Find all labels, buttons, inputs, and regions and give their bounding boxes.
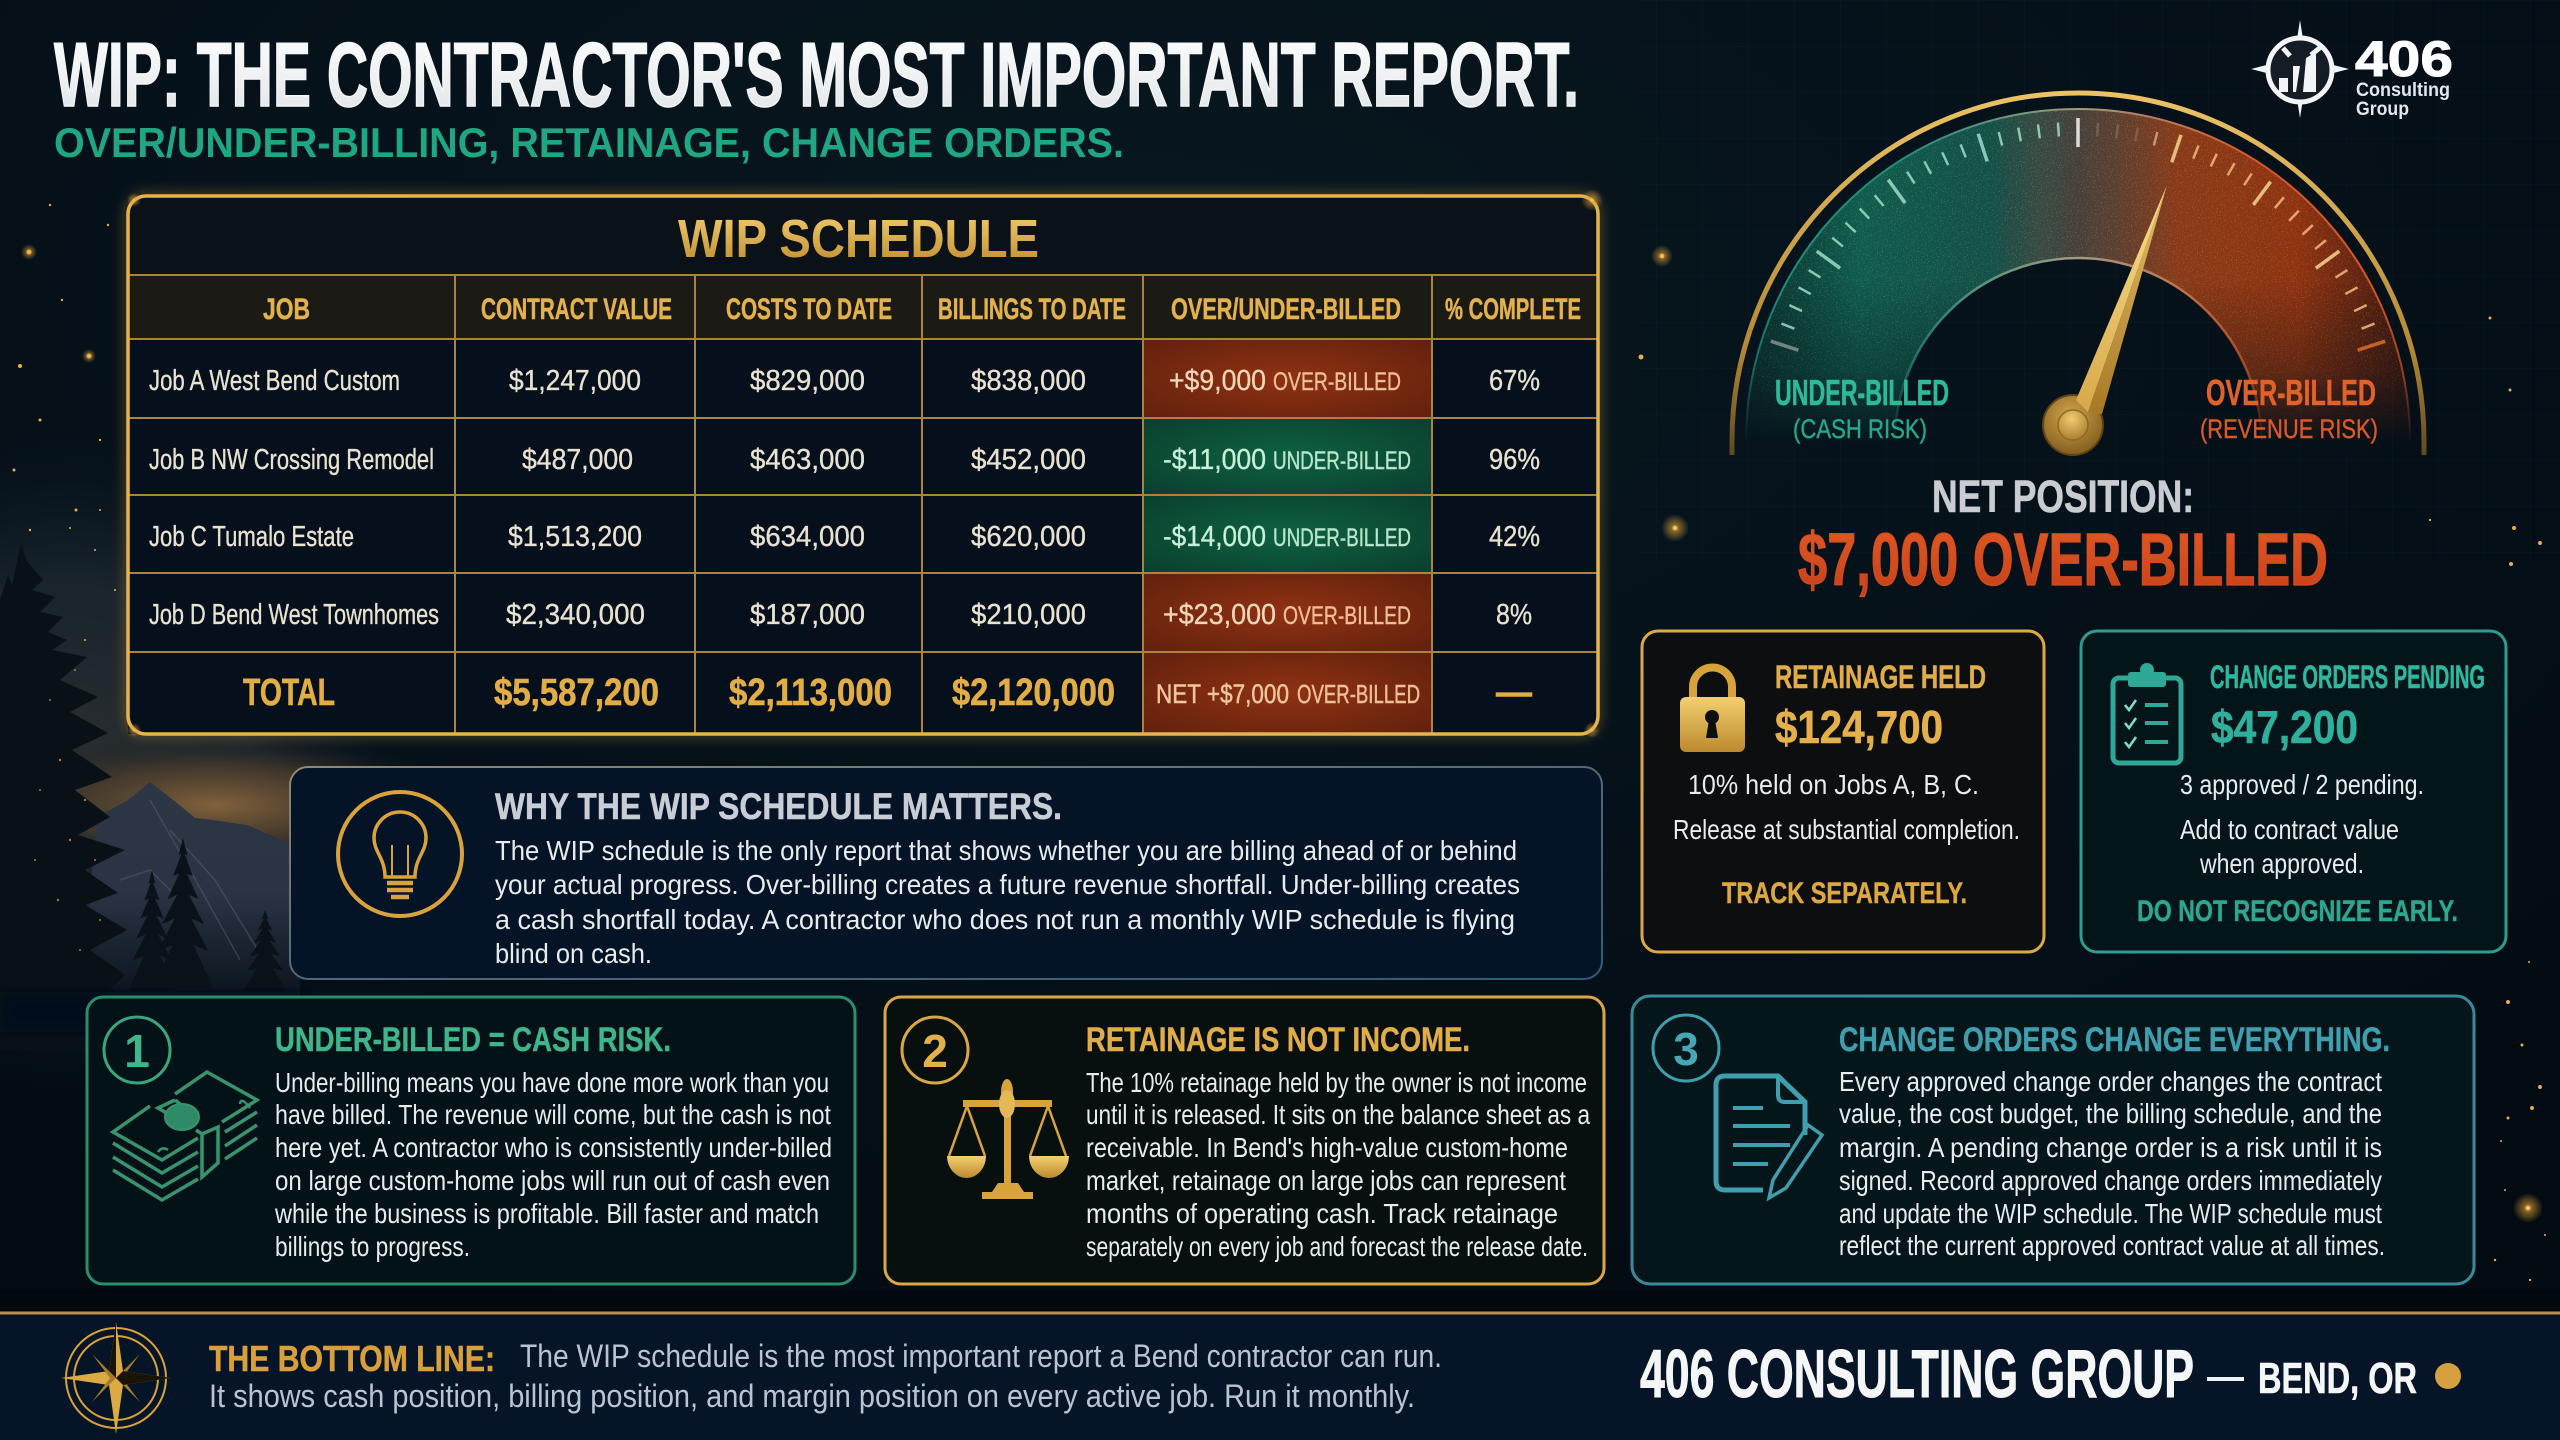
row: Job B: 96% (1489, 444, 1540, 476)
icon: document and pen (1716, 1076, 1822, 1198)
row: Job B: $487,000 (522, 444, 633, 476)
panel: change orders pending: 3 approved / 2 pending. (2180, 769, 2424, 800)
column headers: OVER/UNDER-BILLED (1171, 293, 1401, 326)
column headers: COSTS TO DATE (726, 293, 892, 326)
panel: why the WIP schedule matters: WHY THE WIP SCHEDULE MATTERS. (495, 786, 1062, 827)
panel: under-billed = cash risk: billings to progress. (275, 1231, 470, 1262)
icon: compass rose (61, 1322, 171, 1434)
needle (2076, 185, 2167, 414)
panel: change orders change everything: and update the WIP schedule. The WIP schedule must (1839, 1198, 2382, 1229)
row: Job C: UNDER-BILLED (1273, 524, 1411, 552)
label: over-billed: (REVENUE RISK) (2200, 414, 2378, 444)
panel: under-billed = cash risk: while the business is profitable. Bill faster and match (274, 1198, 819, 1229)
row: Job A: $838,000 (971, 365, 1086, 397)
cell: under-billed C (1143, 495, 1432, 573)
column headers: % COMPLETE (1445, 293, 1581, 326)
row: Job D: $210,000 (971, 599, 1086, 631)
panel: under-billed = cash risk: have billed. The revenue will come, but the cash is not (275, 1099, 831, 1130)
row: Job A: OVER-BILLED (1273, 368, 1401, 396)
cell: over-billed D (1143, 573, 1432, 652)
number badge 3: 3 (1673, 1023, 1699, 1075)
icon: compass mark (2251, 20, 2349, 118)
footer band (0, 1312, 2560, 1440)
row: Job B: UNDER-BILLED (1273, 447, 1411, 475)
label: over-billed (2200, 372, 2378, 444)
panel: change orders pending (2081, 631, 2506, 952)
row: total: $2,120,000 (952, 672, 1115, 714)
panel: retainage is not income: until it is released. It sits on the balance sheet as a (1086, 1099, 1590, 1130)
panel: change orders change everything: value, the cost budget, the billing schedule, and the (1839, 1098, 2382, 1129)
panel: why the WIP schedule matters: The WIP schedule is the only report that shows whether you are billing ahead of or behind (495, 835, 1517, 866)
row: Job B (149, 444, 1540, 476)
footer band: The WIP schedule is the most important report a Bend contractor can run. (520, 1338, 1442, 1374)
row: Job A: +$9,000 (1169, 365, 1266, 397)
panel: change orders pending: when approved. (2199, 848, 2364, 879)
row: total: $5,587,200 (494, 672, 659, 714)
row: Job A: $1,247,000 (509, 365, 641, 397)
row: Job A: 67% (1489, 365, 1540, 397)
panel: why the WIP schedule matters: a cash shortfall today. A contractor who does not run a monthly WIP schedule is flying (495, 904, 1515, 935)
panel: retainage is not income: The 10% retainage held by the owner is not income (1086, 1067, 1587, 1098)
panel: why the WIP schedule matters (290, 767, 1602, 979)
row: Job C: $1,513,200 (508, 521, 642, 553)
panel: change orders change everything: Every approved change order changes the contract (1839, 1066, 2382, 1097)
icon: balance scales (947, 1079, 1069, 1199)
panel: retainage is not income: separately on every job and forecast the release date. (1086, 1231, 1588, 1262)
row: total: — (1496, 672, 1532, 714)
row: Job D: $187,000 (750, 599, 865, 631)
panel: retainage held: RETAINAGE HELD (1775, 659, 1986, 695)
column headers: BILLINGS TO DATE (938, 293, 1126, 326)
icon: clipboard (2113, 663, 2181, 763)
panel: retainage held: 10% held on Jobs A, B, C. (1688, 769, 1979, 800)
cell: over-billed A (1143, 339, 1432, 418)
column headers: CONTRACT VALUE (481, 293, 672, 326)
number badge 3 (1653, 1015, 1719, 1081)
logo: 406 Consulting Group (2251, 20, 2453, 120)
needle hub cap (2058, 410, 2088, 440)
row: Job B: -$11,000 (1163, 444, 1266, 476)
footer band: It shows cash position, billing position, and margin position on every active job. Run it monthly. (209, 1378, 1415, 1414)
row: Job C: -$14,000 (1163, 521, 1266, 553)
row: Job D: 8% (1496, 599, 1532, 631)
label: under-billed: (CASH RISK) (1793, 414, 1927, 444)
row: Job D: +$23,000 (1163, 599, 1276, 631)
label: under-billed: UNDER-BILLED (1775, 372, 1949, 413)
ticks (1771, 118, 2385, 350)
label: under-billed (1775, 372, 1949, 444)
panel: under-billed = cash risk: here yet. A contractor who is consistently under-billed (275, 1132, 832, 1163)
row: Job D: OVER-BILLED (1283, 602, 1411, 630)
needle hub outer (2043, 395, 2103, 455)
panel: retainage is not income: receivable. In Bend's high-value custom-home (1086, 1132, 1568, 1163)
row: Job C: 42% (1489, 521, 1540, 553)
panel: under-billed = cash risk (87, 997, 855, 1284)
panel: retainage held: Release at substantial completion. (1673, 814, 2020, 845)
row: Job A (149, 365, 1540, 397)
panel: retainage is not income: market, retainage on large jobs can represent (1086, 1165, 1566, 1196)
panel: change orders change everything: signed. Record approved change orders immediately (1839, 1165, 2382, 1196)
number badge 1 (104, 1017, 170, 1083)
number badge 2 (902, 1017, 968, 1083)
panel: change orders change everything: margin. A pending change order is a risk until it is (1839, 1132, 2382, 1163)
logo: 406 Consulting Group: Consulting (2356, 80, 2450, 101)
row: Job D (149, 599, 1532, 631)
label: over-billed: OVER-BILLED (2206, 372, 2376, 413)
row: total: OVER-BILLED (1297, 679, 1420, 709)
gauge band (1746, 109, 2410, 441)
row: Job B: $452,000 (971, 444, 1086, 476)
row: total (243, 672, 1532, 714)
icon: light bulb (338, 792, 462, 916)
panel: why the WIP schedule matters: blind on cash. (495, 938, 652, 969)
column headers (263, 293, 1581, 326)
column headers: JOB (263, 293, 310, 326)
subtitle: OVER/UNDER-BILLING, RETAINAGE, CHANGE ORDERS. (54, 119, 1124, 166)
row: Job C: Job C Tumalo Estate (149, 521, 354, 553)
panel: change orders change everything: reflect the current approved contract value at all times. (1839, 1230, 2385, 1261)
panel: change orders pending: Add to contract value (2180, 814, 2399, 845)
number badge 1: 1 (124, 1025, 150, 1077)
row: total: $2,113,000 (729, 672, 892, 714)
panel: under-billed = cash risk: on large custom-home jobs will run out of cash even (275, 1165, 830, 1196)
panel: under-billed = cash risk: UNDER-BILLED = CASH RISK. (275, 1021, 671, 1059)
gold ring (1732, 93, 2424, 455)
row: Job B: $463,000 (750, 444, 865, 476)
icon: money stack (113, 1072, 257, 1200)
panel: retainage held (1642, 631, 2044, 952)
row: Job C: $620,000 (971, 521, 1086, 553)
logo: 406 Consulting Group: Group (2356, 99, 2409, 120)
footer band: THE BOTTOM LINE: (209, 1338, 495, 1379)
panel: retainage held: TRACK SEPARATELY. (1722, 877, 1967, 910)
table heading: WIP SCHEDULE (678, 209, 1039, 269)
row: Job A: Job A West Bend Custom (149, 365, 400, 397)
panel: WIP schedule table (127, 189, 1603, 738)
gauge: under-billed to over-billed (1732, 93, 2424, 455)
number badge 2: 2 (922, 1025, 948, 1077)
panel: retainage is not income: RETAINAGE IS NOT INCOME. (1086, 1021, 1470, 1059)
logo: 406 Consulting Group: 406 (2355, 31, 2453, 87)
panel: change orders pending: DO NOT RECOGNIZE EARLY. (2137, 895, 2458, 928)
row: total: TOTAL (243, 672, 335, 714)
title: WIP: THE CONTRACTOR'S MOST IMPORTANT REPORT. (54, 25, 1579, 126)
panel: retainage held: $124,700 (1775, 701, 1943, 753)
brand sign-off: BEND, OR (2258, 1354, 2417, 1403)
row: Job A: $829,000 (750, 365, 865, 397)
panel: under-billed = cash risk: Under-billing means you have done more work than you (275, 1067, 829, 1098)
panel: change orders pending: $47,200 (2211, 701, 2358, 753)
row: total: NET +$7,000 (1156, 679, 1289, 709)
panel: retainage is not income: months of operating cash. Track retainage (1086, 1198, 1558, 1229)
panel: why the WIP schedule matters: your actual progress. Over-billing creates a future revenue shortfall. Under-billing creates (495, 869, 1520, 900)
brand sign-off: 406 CONSULTING GROUP (1640, 1336, 2194, 1412)
row: Job C (149, 521, 1540, 553)
net position value: $7,000 OVER-BILLED (1798, 518, 2328, 601)
cell: net over-billed (1143, 652, 1432, 734)
panel: change orders change everything: CHANGE ORDERS CHANGE EVERYTHING. (1839, 1021, 2390, 1059)
panel: change orders change everything (1632, 996, 2474, 1284)
row: Job B: Job B NW Crossing Remodel (149, 444, 434, 476)
cell: under-billed B (1143, 418, 1432, 495)
panel: retainage is not income (885, 997, 1604, 1284)
row: Job D: Job D Bend West Townhomes (149, 599, 439, 631)
net position label: NET POSITION: (1932, 471, 2194, 522)
icon: padlock (1680, 668, 1745, 752)
row: Job C: $634,000 (750, 521, 865, 553)
row: Job D: $2,340,000 (506, 599, 645, 631)
